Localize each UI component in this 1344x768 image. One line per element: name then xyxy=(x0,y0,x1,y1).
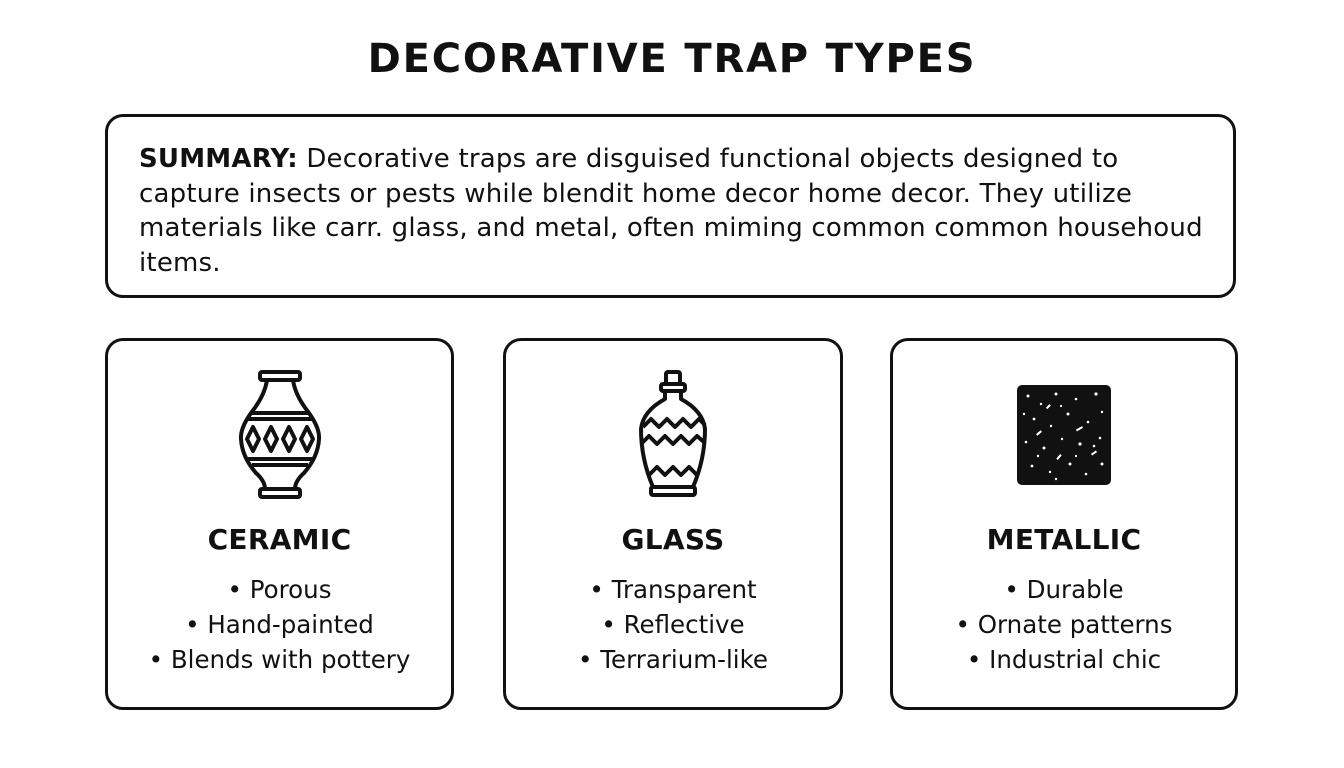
bullet list xyxy=(956,575,1172,674)
heading: CERAMIC xyxy=(208,523,351,556)
icon: metallic speckled square xyxy=(1017,385,1111,485)
summary panel: SUMMARY: Decorative traps are disguised functional objects designed to xyxy=(139,144,1118,174)
bullet list: • Transparent xyxy=(589,575,757,604)
icon: glass bottle xyxy=(639,370,707,497)
summary panel: items. xyxy=(139,248,221,278)
bullet list: • Hand-painted xyxy=(185,610,374,639)
bullet list xyxy=(578,575,768,674)
panel: metallic xyxy=(890,338,1238,710)
panel: ceramic xyxy=(105,338,454,710)
heading: METALLIC xyxy=(987,523,1141,556)
panel: glass xyxy=(503,338,843,710)
bullet list: • Blends with pottery xyxy=(149,645,410,674)
bullet list: • Reflective xyxy=(601,610,745,639)
bullet list: • Porous xyxy=(228,575,331,604)
summary panel xyxy=(105,114,1236,298)
bullet list: • Industrial chic xyxy=(967,645,1161,674)
title: DECORATIVE TRAP TYPES xyxy=(368,36,976,82)
bullet list xyxy=(149,575,410,674)
heading: GLASS xyxy=(621,523,725,556)
summary panel: materials like carr. glass, and metal, often miming common common househoud xyxy=(139,213,1203,243)
summary panel: capture insects or pests while blendit home decor home decor. They utilize xyxy=(139,178,1132,208)
bullet list: • Durable xyxy=(1004,575,1124,604)
bullet list: • Terrarium-like xyxy=(578,645,768,674)
bullet list: • Ornate patterns xyxy=(956,610,1172,639)
icon: ceramic vase xyxy=(238,370,322,499)
